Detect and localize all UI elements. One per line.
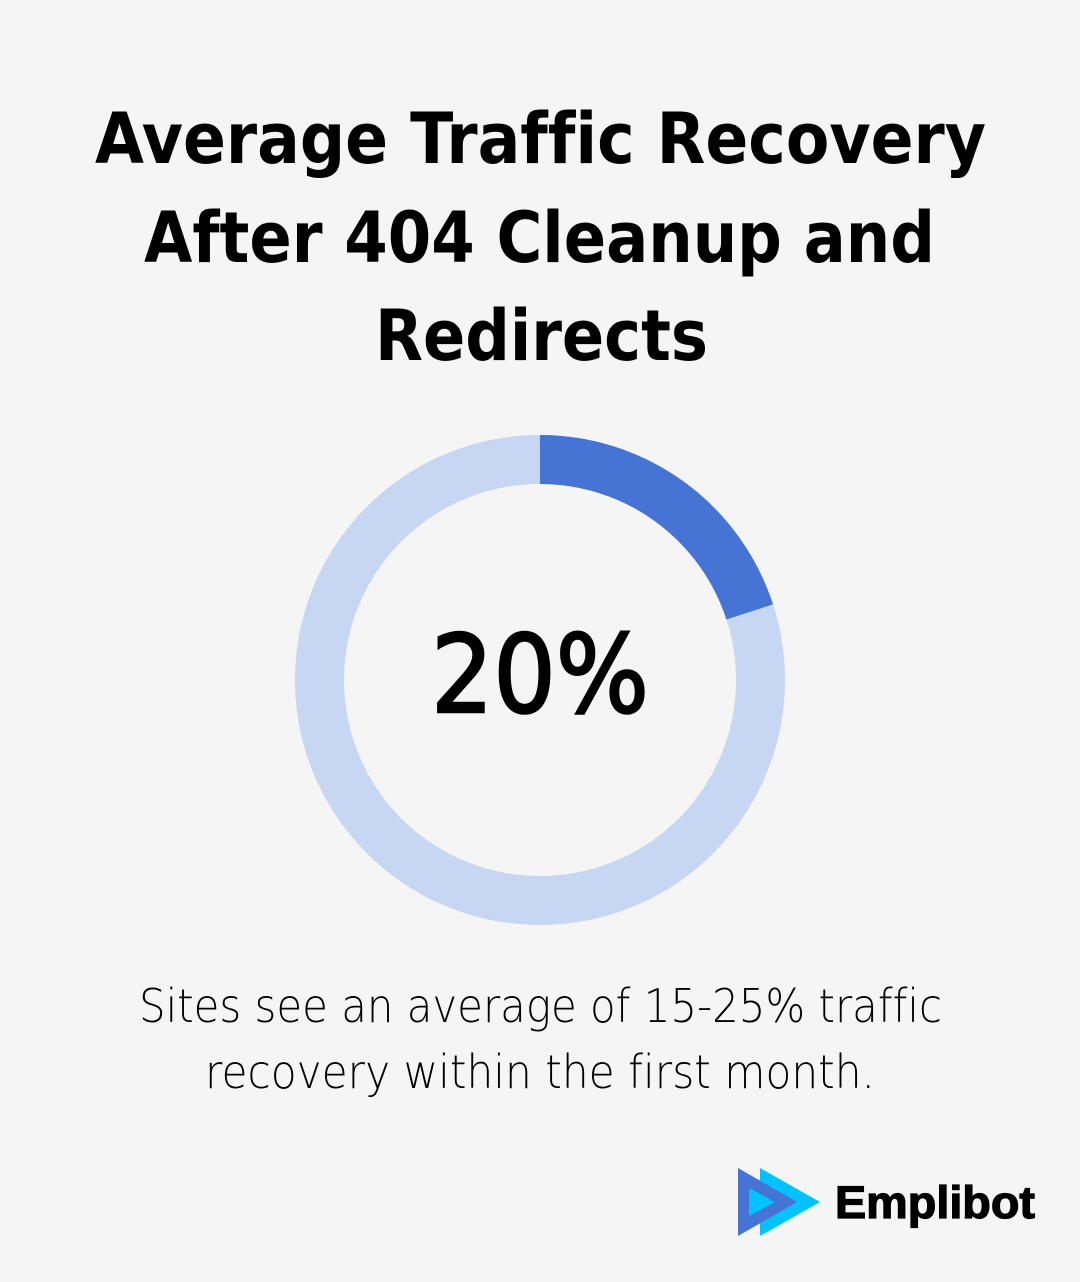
logo wordmark: Emplibot	[835, 1177, 1035, 1228]
icon: play triangles	[738, 1168, 820, 1236]
description: Sites see an average of 15-25% traffic	[139, 979, 942, 1033]
description	[139, 979, 942, 1099]
logo: Emplibot	[738, 1168, 1035, 1236]
title	[95, 98, 986, 377]
title: Average Traffic Recovery	[95, 98, 986, 180]
center value: 20%	[431, 613, 649, 738]
donut chart: 20%	[320, 460, 760, 900]
title: After 404 Cleanup and	[144, 197, 935, 279]
description: recovery within the first month.	[205, 1045, 875, 1099]
title: Redirects	[375, 295, 708, 377]
